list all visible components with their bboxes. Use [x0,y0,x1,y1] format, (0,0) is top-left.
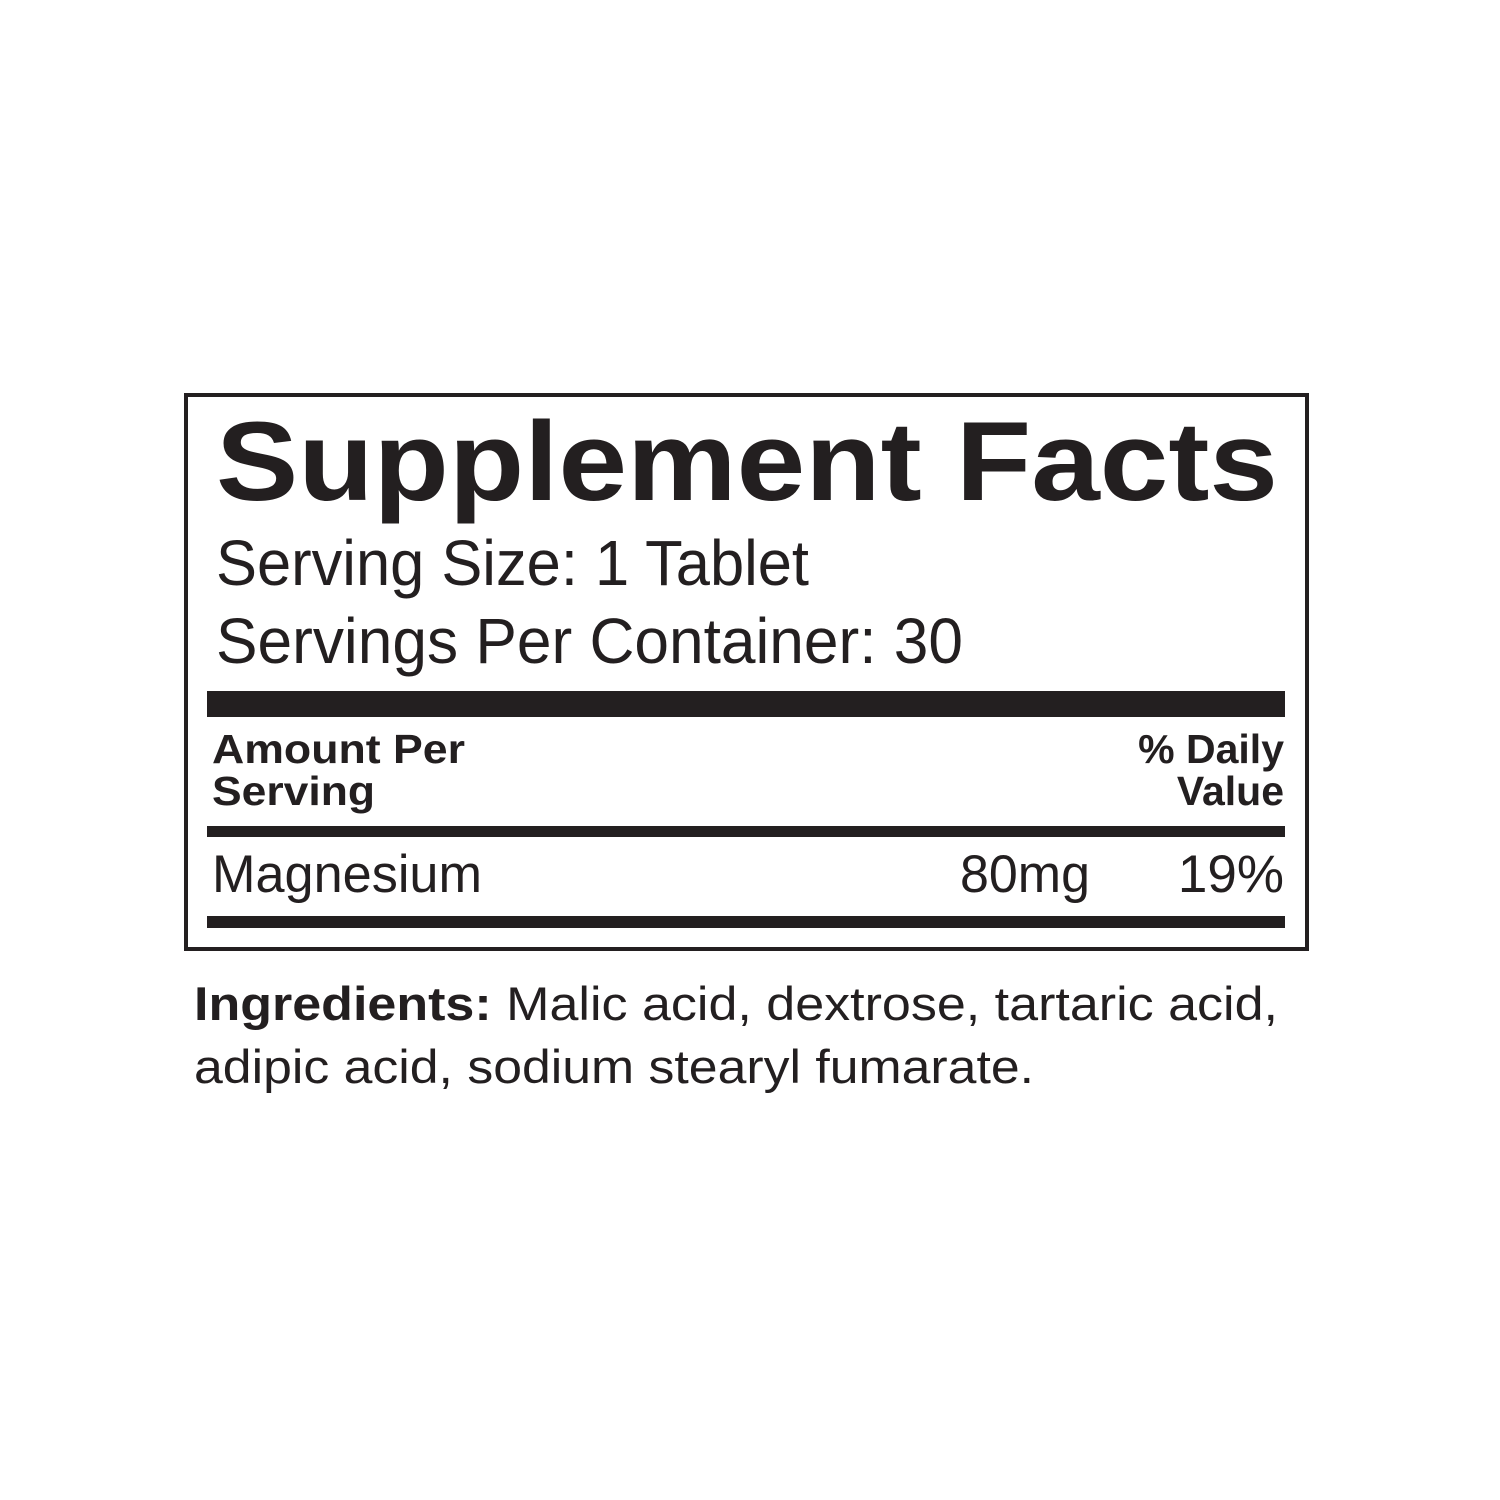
row: magnesium: 80mg [960,845,1090,904]
header: amount per serving: Serving [212,768,375,814]
thin bar [207,826,1285,837]
row: magnesium: Magnesium [212,845,482,904]
ingredients text [194,977,1278,1093]
serving size: Serving Size: 1 Tablet [216,527,809,599]
header: amount per serving: Amount Per [212,726,465,772]
header: daily value: % Daily [1138,726,1284,772]
ingredients text: adipic acid, sodium stearyl fumarate. [194,1040,1034,1093]
ingredients text: Ingredients: Malic acid, dextrose, tartaric acid, [194,977,1278,1030]
thick bar [207,691,1285,717]
title: Supplement Facts [216,399,1278,524]
row: magnesium [212,845,1284,904]
header: amount per serving [212,726,465,814]
header: daily value: Value [1177,768,1284,814]
header: daily value [1138,726,1284,814]
bottom bar [207,916,1285,928]
row: magnesium: 19% [1178,845,1284,904]
servings per container: Servings Per Container: 30 [216,605,963,677]
panel: supplement facts box [186,395,1307,949]
